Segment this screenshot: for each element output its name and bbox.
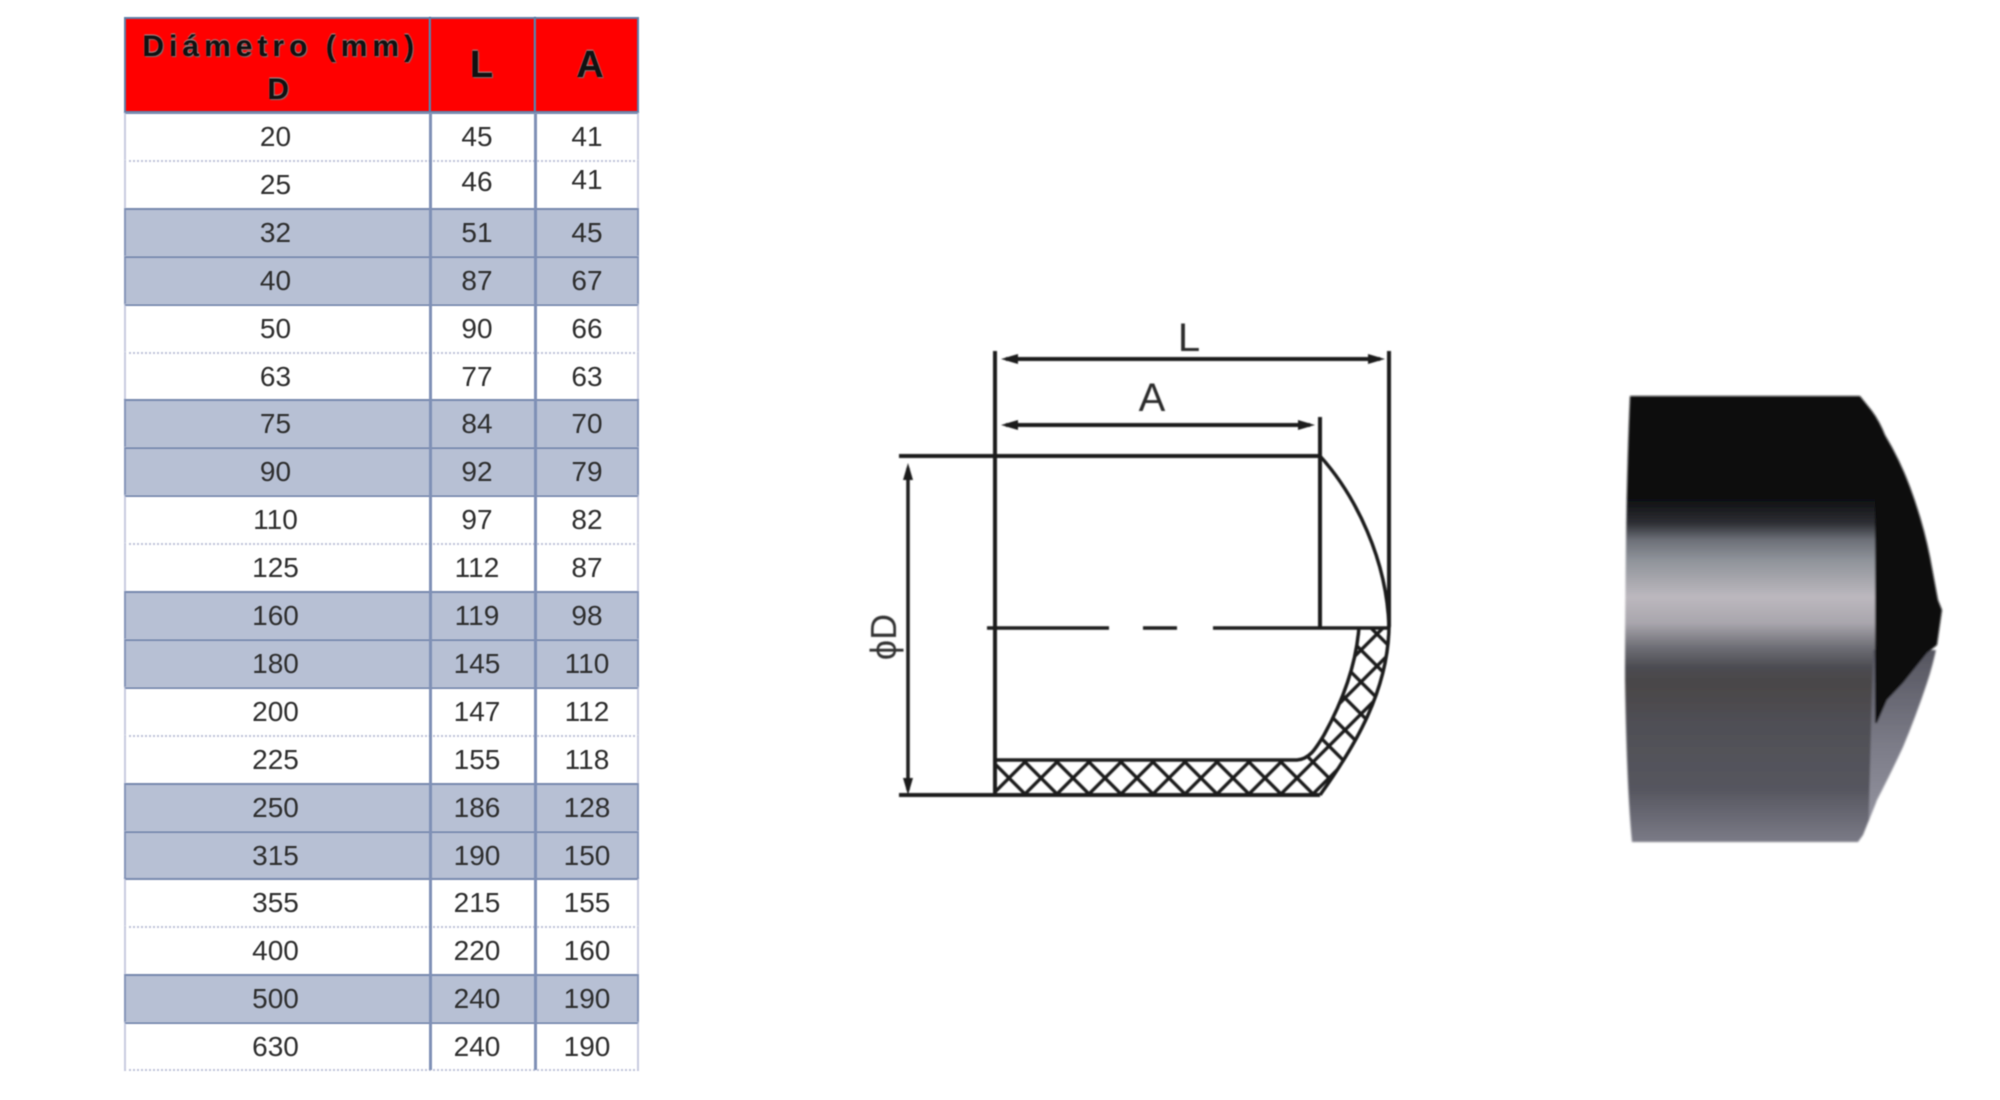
row 160: 98 bbox=[571, 600, 603, 631]
row 63 bbox=[124, 352, 639, 400]
row 90: 92 bbox=[461, 456, 493, 487]
row 20 bbox=[124, 112, 639, 160]
row 500: 240 bbox=[454, 983, 500, 1014]
row 50: 66 bbox=[571, 313, 603, 344]
header: diameter column: D bbox=[267, 73, 294, 106]
header: L column: L bbox=[470, 44, 493, 86]
header: diameter column: Diámetro (mm) bbox=[142, 30, 419, 63]
row 180: 180 bbox=[252, 648, 299, 679]
row 630 bbox=[124, 1022, 639, 1071]
row 200: 147 bbox=[454, 696, 500, 727]
row 180: 110 bbox=[565, 648, 609, 679]
row 20: 45 bbox=[461, 121, 493, 152]
row 500: 190 bbox=[564, 983, 610, 1014]
row 355: 355 bbox=[252, 887, 299, 918]
row 250: 128 bbox=[564, 792, 610, 823]
row 40: 87 bbox=[461, 265, 493, 296]
row 32: 51 bbox=[461, 217, 493, 248]
row 20: 20 bbox=[260, 121, 291, 152]
row 225: 155 bbox=[454, 744, 500, 775]
row 63: 63 bbox=[260, 360, 291, 392]
row 315: 190 bbox=[454, 840, 500, 870]
row 110: 110 bbox=[253, 504, 298, 535]
row 355 bbox=[124, 878, 639, 926]
cap body bbox=[1620, 390, 1876, 850]
row 630: 630 bbox=[252, 1031, 299, 1062]
outline of cap bbox=[899, 351, 1389, 795]
row 75: 84 bbox=[461, 408, 493, 439]
row 110 bbox=[124, 495, 639, 543]
row 20: 41 bbox=[571, 121, 603, 152]
row 630: 240 bbox=[454, 1031, 500, 1062]
row 32: 32 bbox=[260, 217, 291, 248]
centre line bbox=[987, 626, 1389, 630]
row 180: 145 bbox=[454, 648, 500, 679]
row 125: 112 bbox=[455, 552, 499, 583]
row 225: 225 bbox=[252, 744, 299, 775]
row 315: 315 bbox=[252, 840, 299, 870]
row 90 bbox=[124, 447, 639, 495]
technical drawing: cap cross-section bbox=[868, 322, 1944, 844]
row 400 bbox=[124, 926, 639, 974]
dimension arrow L bbox=[1001, 354, 1385, 364]
header: L column bbox=[429, 17, 536, 113]
dimension arrow A bbox=[1001, 420, 1315, 430]
row 180 bbox=[124, 639, 639, 687]
table: cap dimensions bbox=[123, 16, 640, 1072]
row 32: 45 bbox=[571, 217, 603, 248]
row 50: 90 bbox=[461, 313, 493, 344]
row 50 bbox=[124, 304, 639, 352]
photo: black cap bbox=[1620, 390, 1950, 850]
row 315 bbox=[124, 830, 639, 878]
row 40 bbox=[124, 256, 639, 304]
row 125: 87 bbox=[571, 552, 603, 583]
row 200: 112 bbox=[565, 696, 609, 727]
header: A column bbox=[534, 17, 639, 113]
label A: A bbox=[1139, 376, 1166, 420]
row 160: 160 bbox=[252, 600, 299, 631]
row 400: 400 bbox=[252, 935, 299, 966]
row 25: 25 bbox=[260, 169, 291, 200]
row 63: 63 bbox=[571, 360, 603, 392]
row 25: 46 bbox=[461, 166, 493, 197]
row 250: 186 bbox=[454, 792, 500, 823]
row 125: 125 bbox=[252, 552, 299, 583]
row 90: 90 bbox=[260, 456, 291, 487]
row 25: 41 bbox=[571, 164, 603, 195]
row 400: 160 bbox=[564, 935, 610, 966]
row 75: 70 bbox=[571, 408, 603, 439]
row 500: 500 bbox=[252, 983, 299, 1014]
row 200: 200 bbox=[252, 696, 299, 727]
row 32 bbox=[124, 208, 639, 256]
row 25 bbox=[124, 160, 639, 208]
row 50: 50 bbox=[260, 313, 291, 344]
hatched wall section bbox=[995, 627, 1389, 795]
row 110: 97 bbox=[461, 504, 493, 535]
header: A column: A bbox=[576, 44, 604, 86]
header: diameter column bbox=[124, 17, 430, 113]
row 63: 77 bbox=[461, 360, 493, 392]
row 355: 155 bbox=[564, 887, 610, 918]
label phi D: ϕD bbox=[863, 614, 904, 660]
dimension arrow D bbox=[903, 463, 913, 795]
row 225 bbox=[124, 735, 639, 783]
row 355: 215 bbox=[454, 887, 500, 918]
row 500 bbox=[124, 974, 639, 1022]
row 200 bbox=[124, 687, 639, 735]
row 630: 190 bbox=[564, 1031, 610, 1062]
row 40: 67 bbox=[571, 265, 603, 296]
row 160 bbox=[124, 591, 639, 639]
row 125 bbox=[124, 543, 639, 591]
cap domed end lower bbox=[1868, 648, 1938, 818]
row 75 bbox=[124, 399, 639, 447]
row 250 bbox=[124, 783, 639, 831]
row 160: 119 bbox=[455, 600, 499, 631]
row 400: 220 bbox=[454, 935, 500, 966]
row 110: 82 bbox=[571, 504, 603, 535]
row 40: 40 bbox=[260, 265, 291, 296]
row 225: 118 bbox=[565, 744, 609, 775]
label L: L bbox=[1178, 316, 1200, 360]
row 250: 250 bbox=[252, 792, 299, 823]
row 315: 150 bbox=[564, 840, 610, 870]
cap domed end black bbox=[1874, 416, 1944, 724]
row 75: 75 bbox=[260, 408, 291, 439]
row 90: 79 bbox=[571, 456, 603, 487]
